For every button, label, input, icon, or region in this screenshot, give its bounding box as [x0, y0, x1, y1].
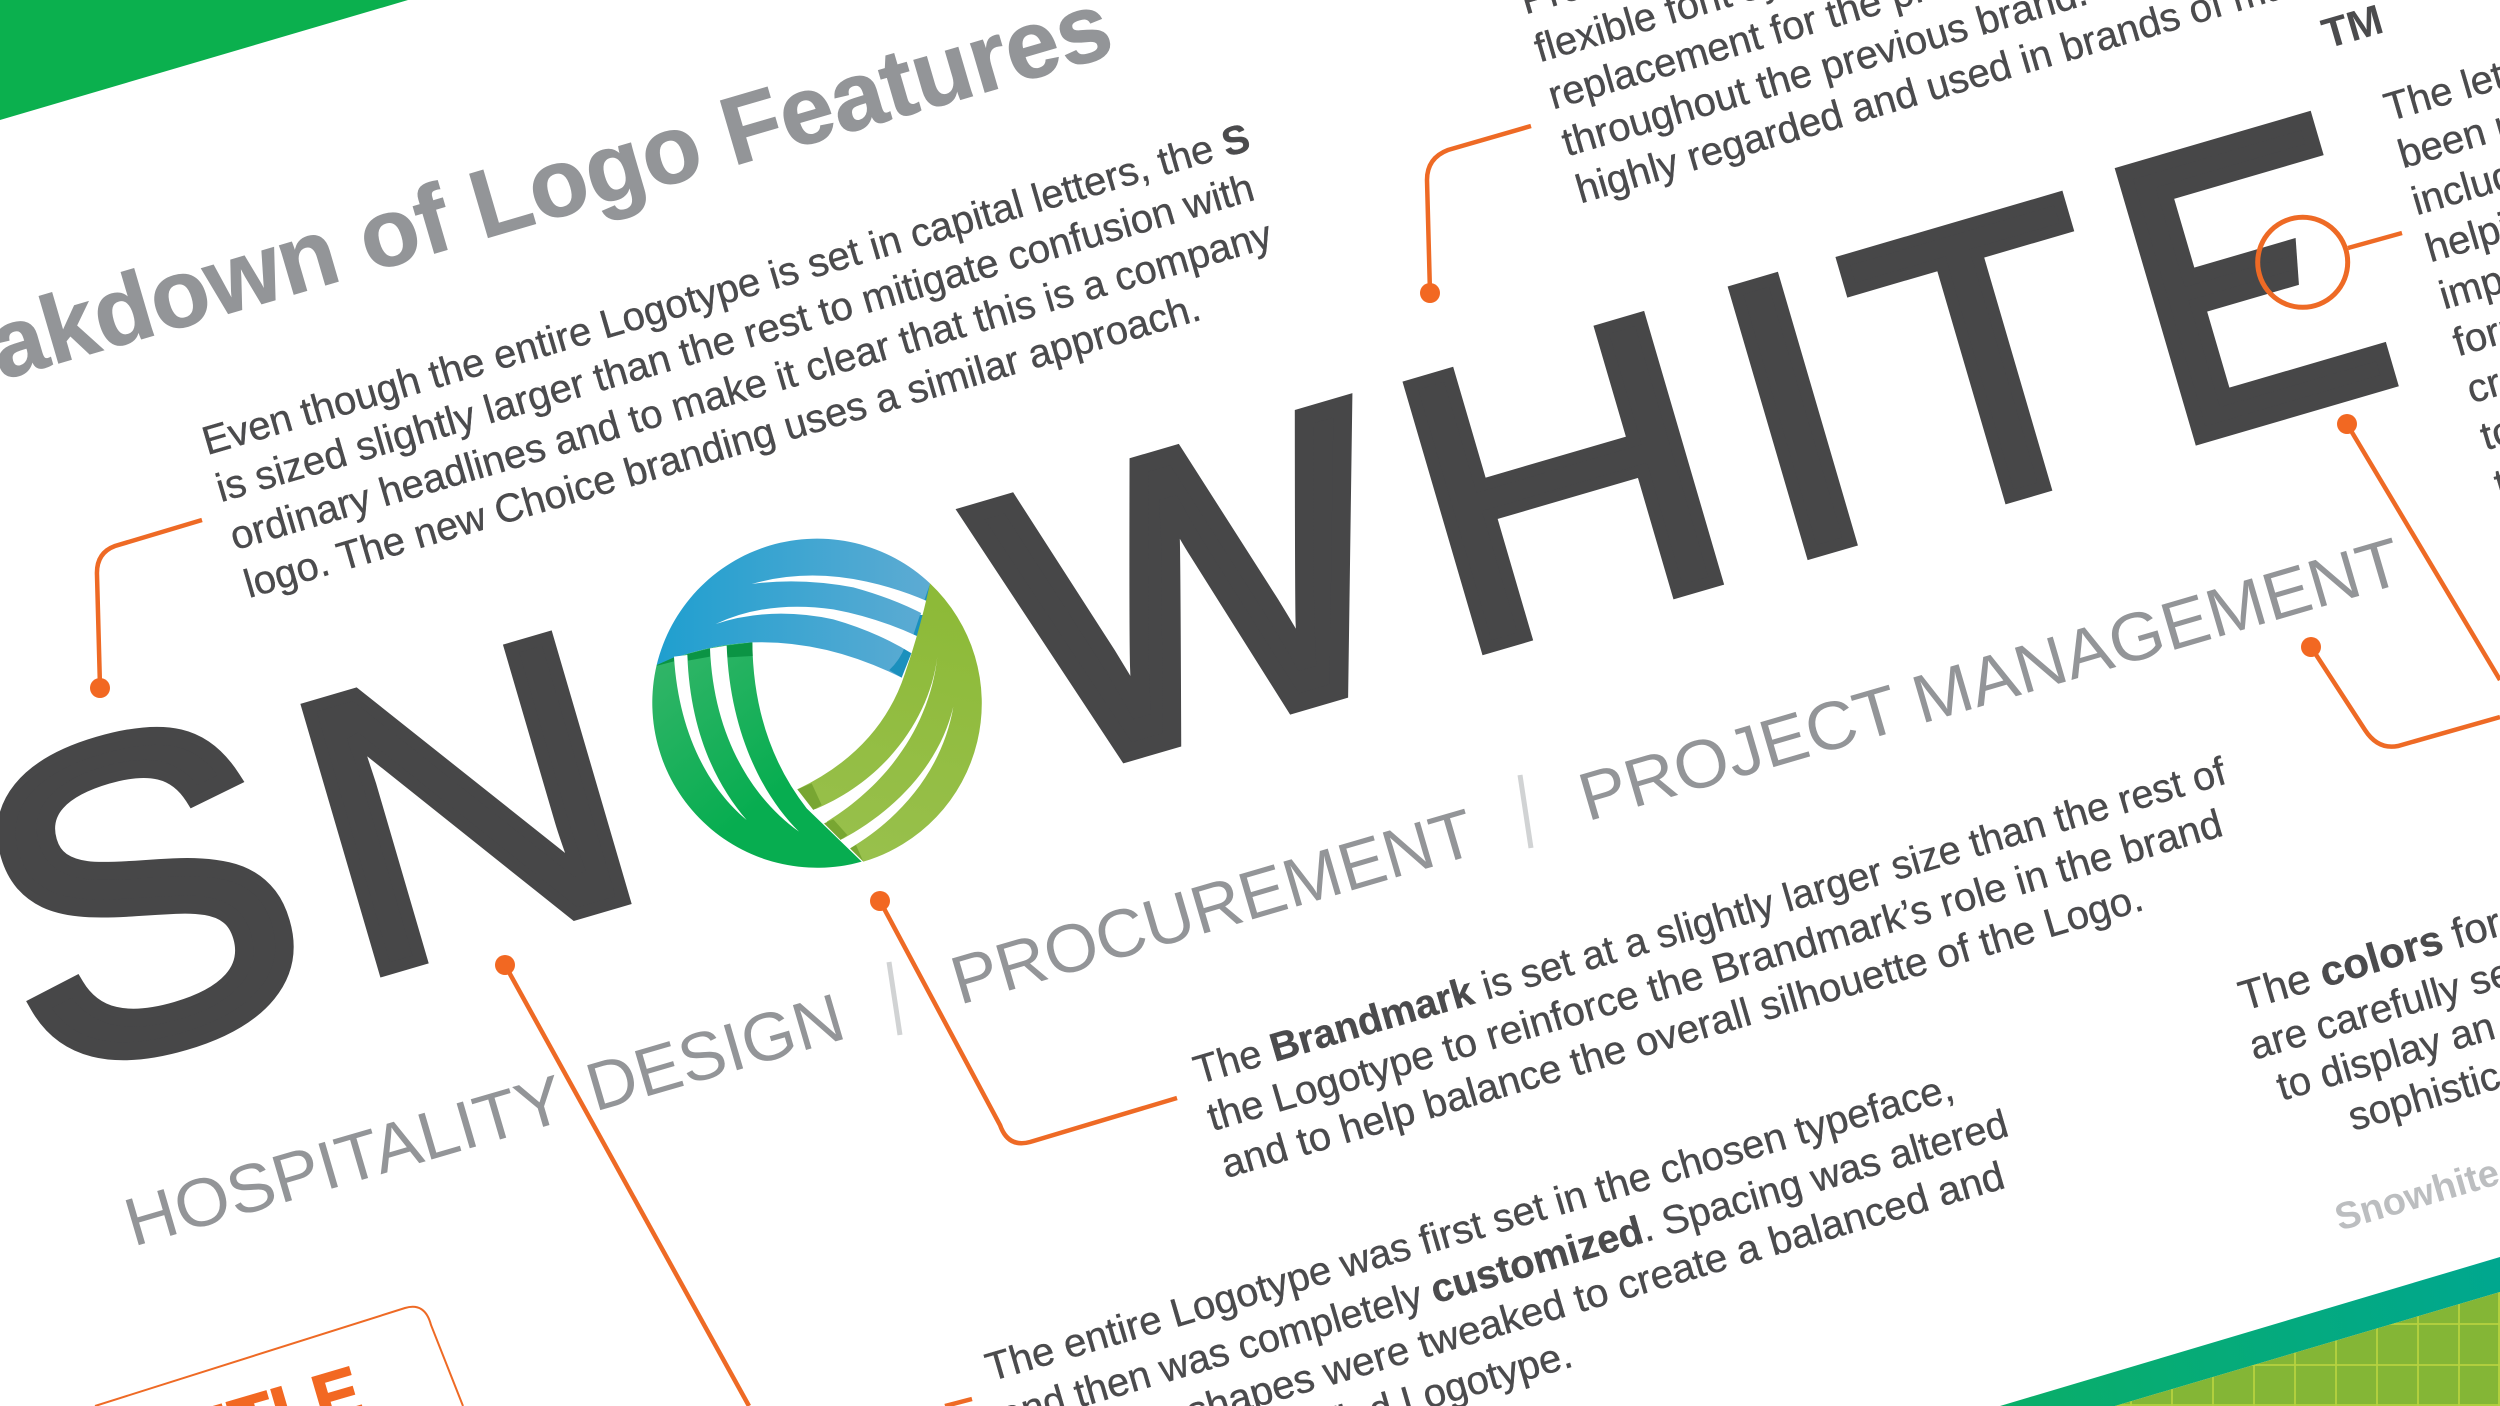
tagline services: PROCUREMENT: [943, 795, 1483, 1019]
light green leaf: [797, 583, 982, 862]
logotype SNOWHITE letters: N: [249, 546, 682, 1061]
text block: capital S note: [197, 116, 1297, 607]
callout: font note connector: [1420, 126, 1531, 303]
title box outline: [95, 1307, 463, 1406]
text block: brandmark note: The Brandmark is set at a slightly larger size than the rest of: [1189, 749, 2232, 1093]
tagline services: DESIGN: [578, 979, 853, 1126]
text block: brandmark note: the Logotype to reinforce the Brandmark’s role in the brand: [1202, 802, 2227, 1140]
tagline services: PROJECT MANAGEMENT: [1570, 524, 2410, 836]
logotype SNOWHITE letters: E: [2071, 32, 2428, 525]
tagline services: [116, 524, 2410, 1261]
callout: S note connector: [90, 520, 202, 698]
teal footer stripe: [2000, 1257, 2500, 1406]
text block: capital S note: ordinary headlines and to make it clear that this is a company: [225, 213, 1277, 559]
text block: brandmark note: and to help balance the overall silhouette of the Logo.: [1216, 876, 2148, 1187]
logotype SNOWHITE letters: H: [1353, 227, 1774, 739]
callout: colors connector: [2337, 414, 2500, 680]
brandmark icon: [652, 539, 982, 868]
callout: N connector to title box: [495, 955, 749, 1406]
footer label: Snowhite: [2330, 1152, 2500, 1239]
logotype SNOWHITE letters: T: [1811, 114, 2168, 607]
green corner banner: [0, 0, 408, 120]
callout: logotype note connector stub: [945, 1399, 972, 1406]
text block: colors note: [2229, 818, 2500, 1161]
text block: capital S note: Even though the entire Logotype is set in capital letters, the S: [197, 116, 1255, 464]
footer corner band with grid: [2000, 1257, 2500, 1406]
logotype SNOWHITE letters: I: [1674, 186, 1912, 645]
green leaf: [652, 642, 862, 868]
callout: E detail ring: [2258, 217, 2402, 307]
green grid panel: [2115, 1292, 2500, 1406]
tagline services: HOSPITALITY: [116, 1061, 573, 1261]
text block: logotype customization note: The entire Logotype was first set in the chosen typeface,: [981, 1066, 1959, 1390]
text block: capital S note: is sized slightly larger than the rest to mitigate confusion with: [211, 166, 1259, 511]
blue leaf: [657, 539, 930, 678]
callout: tagline connector: [2301, 637, 2500, 747]
callout: brandmark connector: [870, 891, 1177, 1143]
text block: capital S note: logo. The new Choice branding uses a similar approach.: [239, 286, 1205, 607]
divider slash 1: [889, 962, 900, 1035]
divider slash 2: [1520, 775, 1531, 848]
logotype SNOWHITE letters: W: [944, 322, 1448, 859]
text block: letter E note: [2379, 8, 2500, 506]
